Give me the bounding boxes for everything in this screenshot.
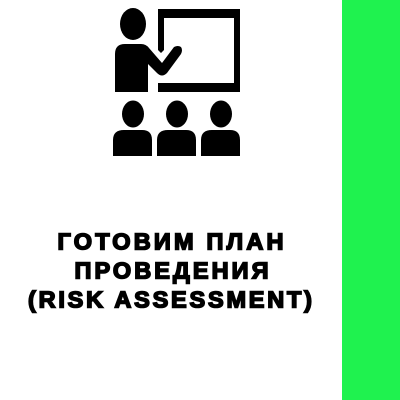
whiteboard frame <box>158 9 240 92</box>
audience <box>113 100 240 156</box>
title text: (RISK ASSESSMENT) <box>28 286 312 312</box>
presenter <box>115 8 182 92</box>
title text: ГОТОВИМ ПЛАН <box>58 228 284 254</box>
green side panel <box>342 0 400 400</box>
icon: teacher at board with audience <box>113 8 240 156</box>
title text <box>28 228 312 312</box>
title text: ПРОВЕДЕНИЯ <box>74 258 268 284</box>
